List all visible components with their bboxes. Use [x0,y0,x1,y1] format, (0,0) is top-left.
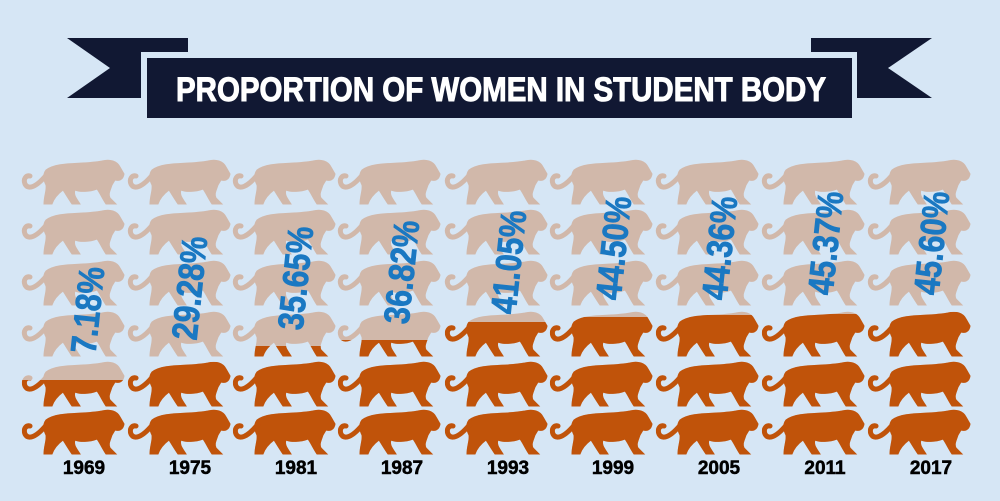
percentage labels: 44.50% [589,194,640,302]
percentage labels: 7.18% [64,265,113,355]
year labels: 1999 [592,458,634,479]
year labels: 2005 [698,458,741,479]
percentage labels: 29.28% [165,234,216,342]
percentage labels: 44.36% [695,194,746,302]
title banner [67,38,932,118]
percentage labels: 45.37% [801,189,852,297]
year labels: 1969 [63,458,105,479]
year labels: 1987 [381,458,423,479]
year labels: 1981 [275,458,318,479]
year labels: 1975 [169,458,212,479]
tiger pictogram grid [24,160,970,454]
year labels: 2017 [910,458,952,479]
percentage labels [64,189,958,355]
percentage labels: 35.65% [271,224,322,332]
year labels: 2011 [804,458,846,479]
percentage labels: 36.82% [377,218,428,326]
year labels: 1993 [487,458,529,479]
percentage labels: 41.05% [484,208,535,316]
percentage labels: 45.60% [907,189,958,297]
year labels [63,458,952,479]
title: PROPORTION OF WOMEN IN STUDENT BODY [176,71,826,109]
